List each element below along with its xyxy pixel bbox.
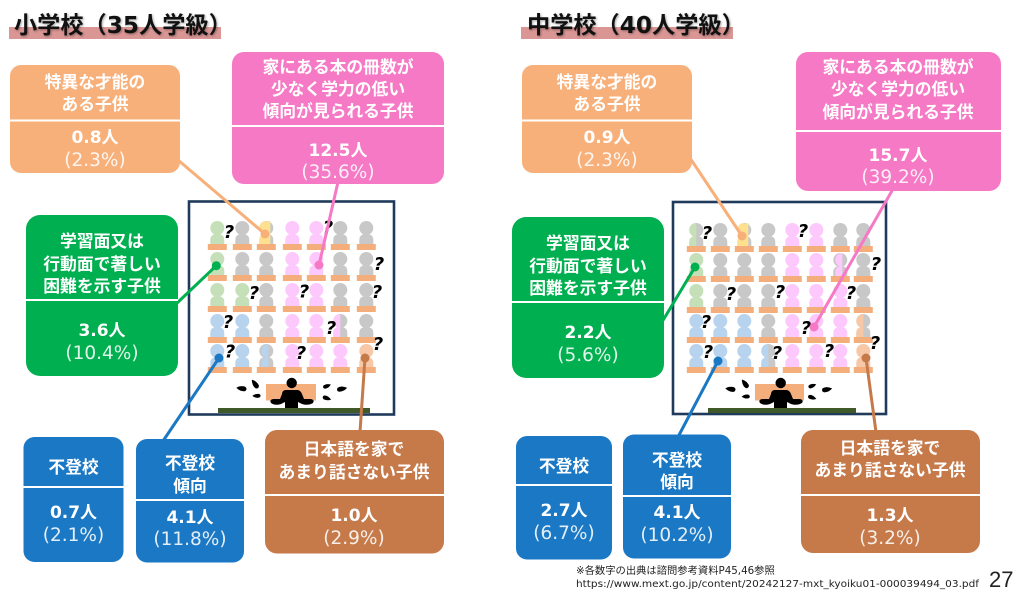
connector: language, elementary [360,354,370,432]
panel: learning difficulty, junior high [512,217,664,378]
panel: absence tendency, junior high: 4.1人 [653,503,701,523]
panel: language at home, junior high: あまり話さない子供 [814,460,966,480]
classroom: junior high: ? [801,318,811,339]
panel: language at home, elementary: 1.0人 [330,506,378,526]
classroom: junior high [673,202,886,414]
panel: gifted, junior high: ある子供 [573,94,641,114]
panel: gifted, elementary: 特異な才能の [45,72,145,92]
panel: language at home, junior high: 1.3人 [866,506,914,526]
panel: learning difficulty, junior high: 行動面で著しい [529,256,647,276]
panel: absence tendency, elementary: (11.8%) [153,529,227,550]
classroom: elementary: ? [323,218,333,238]
panel: gifted, junior high: 0.9人 [583,128,631,148]
page number: 27 [989,567,1013,592]
classroom: elementary: ? [249,283,259,304]
panel: language at home, elementary [265,430,444,554]
panel: learning difficulty, junior high: (5.6%) [557,345,619,366]
panel: gifted, elementary: ある子供 [61,94,129,114]
connector: learning difficulty, junior high [662,262,700,322]
panel: school absence, junior high: 不登校 [539,456,589,476]
connector: language, junior high [862,354,876,432]
heading: elementary school: 小学校（35人学級） [14,12,232,39]
panel: low achievement, elementary [232,52,444,184]
panel: school absence, elementary: 0.7人 [50,503,97,523]
panel: learning difficulty, elementary: 学習面又は [60,231,144,251]
classroom: elementary: ? [223,312,233,333]
panel: learning difficulty, junior high: 2.2人 [564,323,612,343]
panel: absence tendency, junior high: 傾向 [660,472,694,492]
panel: learning difficulty, elementary: (10.4%) [65,343,139,364]
classroom: elementary: ? [299,282,309,302]
panel: absence tendency, elementary [136,439,244,562]
panel: low achievement, junior high: 15.7人 [869,146,927,166]
classroom: elementary: ? [326,318,336,339]
teacher at desk [236,378,348,408]
classroom: elementary: ? [225,342,235,362]
panel: learning difficulty, elementary: 行動面で著しい [43,254,161,274]
connector: low achievement, junior high [810,189,893,332]
footnote: ※各数字の出典は諮問参考資料P45,46参照 [576,564,775,577]
panel: absence tendency, elementary: 不登校 [165,453,215,473]
panel: learning difficulty, elementary [26,215,178,376]
footnote: https://www.mext.go.jp/content/20242127-mxt_kyoiku01-000039494_03.pdf [576,579,979,590]
panel: low achievement, junior high: (39.2%) [861,167,935,188]
footnote [576,564,979,590]
panel: school absence, junior high: 2.7人 [540,501,588,521]
panel: gifted, elementary: (2.3%) [64,150,126,171]
classroom: junior high: ? [870,333,880,354]
panel: absence tendency, elementary: 傾向 [173,476,207,496]
panel: low achievement, elementary: 家にある本の冊数が [262,57,414,77]
classroom: junior high: ? [846,283,856,304]
panel: low achievement, elementary: 少なく学力の低い [271,79,405,99]
panel: low achievement, elementary: 12.5人 [309,141,367,161]
classroom: junior high: ? [702,223,712,244]
panel: school absence, elementary: 不登校 [48,457,99,477]
panel: low achievement, junior high [796,52,1001,191]
panel: school absence, junior high: (6.7%) [533,523,595,544]
connector: low achievement, elementary [314,182,338,270]
panel: low achievement, junior high: 傾向が見られる子供 [822,102,974,122]
classroom: elementary: ? [296,343,306,364]
panel: gifted, junior high [522,65,692,173]
classroom: junior high: ? [772,343,782,364]
panel: learning difficulty, elementary: 困難を示す子供 [43,276,161,296]
panel: gifted, junior high: (2.3%) [576,150,638,171]
panel: school absence, junior high [516,436,612,560]
connector: absence tendency, elementary [163,354,224,441]
panel: absence tendency, junior high: (10.2%) [640,525,714,546]
panel: language at home, elementary: あまり話さない子供 [278,462,430,482]
heading: junior high school: 中学校（40人学級） [527,12,745,39]
panel: gifted, junior high: 特異な才能の [557,72,657,92]
classroom: junior high: ? [726,284,736,305]
panel: low achievement, elementary: 傾向が見られる子供 [262,101,414,121]
classroom: junior high: ? [871,254,881,275]
panel: absence tendency, elementary: 4.1人 [166,508,214,528]
classroom: junior high: ? [701,312,711,333]
classroom: junior high: ? [703,342,713,363]
classroom: elementary: ? [372,282,382,303]
panel: gifted, elementary [10,65,180,173]
panel: school absence, elementary [24,437,124,562]
connector: learning difficulty, elementary [176,261,221,304]
connector: gifted, elementary [178,160,270,238]
panel: school absence, elementary: (2.1%) [43,525,104,546]
teacher at desk [725,378,833,408]
classroom: junior high: ? [775,282,785,303]
connector: absence tendency, junior high [678,356,722,437]
panel: language at home, junior high: 日本語を家で [840,438,940,458]
panel: low achievement, junior high: 家にある本の冊数が [822,57,974,77]
panel: learning difficulty, junior high: 学習面又は [546,233,630,253]
panel: language at home, elementary: (2.9%) [323,528,385,549]
panel: low achievement, elementary: (35.6%) [301,162,375,183]
panel: language at home, elementary: 日本語を家で [304,439,404,459]
classroom: elementary: ? [373,334,383,355]
panel: absence tendency, junior high: 不登校 [652,450,702,470]
panel: gifted, elementary: 0.8人 [71,128,119,148]
connector: gifted, junior high [690,158,746,240]
panel: low achievement, junior high: 少なく学力の低い [831,79,965,99]
panel: learning difficulty, elementary: 3.6人 [78,321,126,341]
panel: learning difficulty, junior high: 困難を示す子供 [529,278,647,298]
classroom: elementary: ? [224,222,234,243]
classroom: junior high: ? [824,341,834,362]
panel: language at home, junior high [801,430,980,553]
panel: language at home, junior high: (3.2%) [859,528,921,549]
classroom: junior high: ? [798,221,808,242]
classroom: elementary [189,202,394,414]
panel: absence tendency, junior high [623,434,731,558]
classroom: elementary: ? [374,254,384,275]
